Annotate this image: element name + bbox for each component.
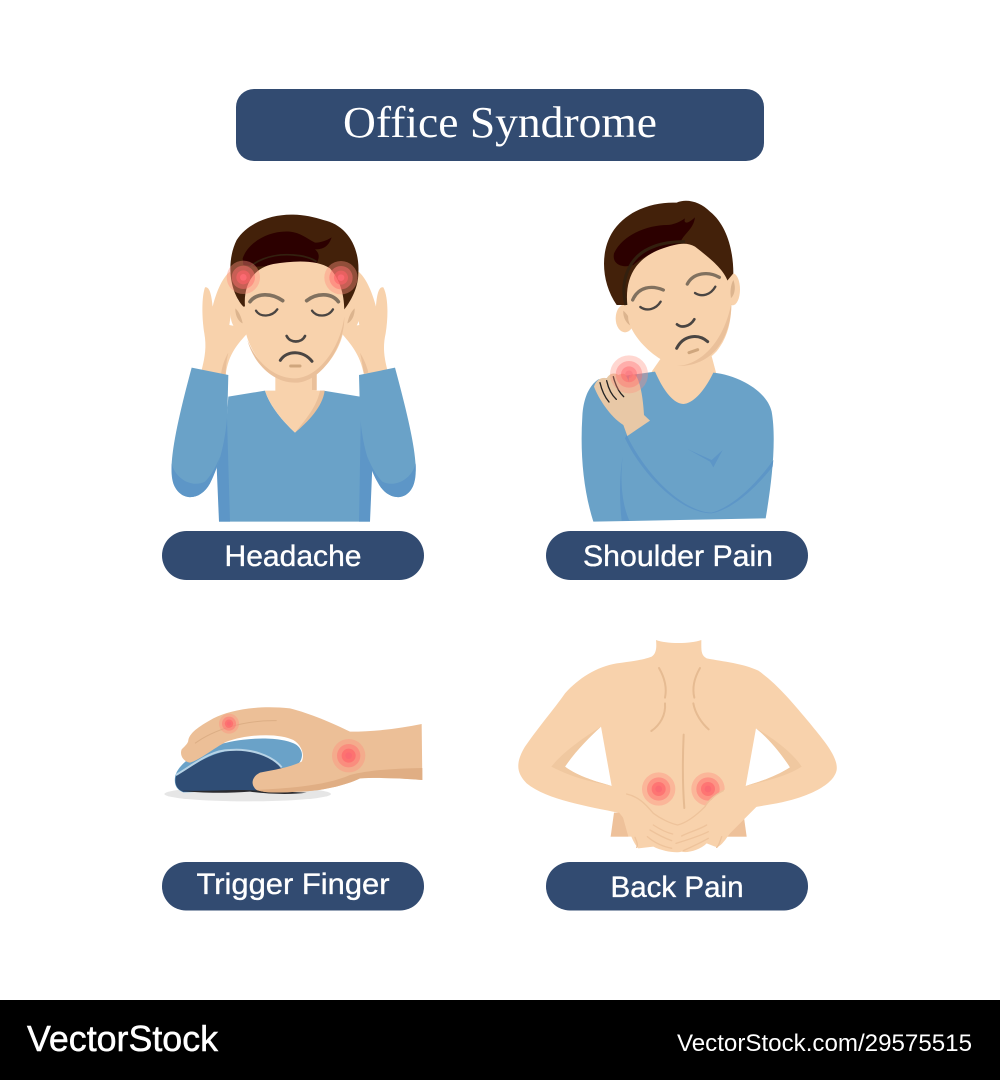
label: trigger finger: Trigger Finger	[196, 868, 390, 901]
nose	[677, 319, 694, 326]
ears	[231, 300, 248, 330]
label: shoulder pain: Shoulder Pain	[583, 540, 773, 573]
pain mark	[610, 355, 648, 393]
gaps between hands and head	[229, 312, 235, 326]
neck	[652, 350, 717, 412]
eyebrows	[633, 287, 663, 300]
pain marks	[642, 772, 675, 806]
hand	[594, 374, 650, 436]
figure: trigger finger	[164, 707, 422, 801]
ears	[616, 304, 634, 332]
hands and forearms	[202, 272, 387, 375]
face	[245, 261, 345, 382]
footer bar: VectorStock	[27, 1018, 219, 1059]
torso	[582, 372, 774, 522]
label: shoulder pain	[546, 531, 808, 580]
hand	[181, 707, 422, 792]
figure: headache	[171, 215, 416, 522]
label: headache: Headache	[224, 540, 362, 573]
eyes	[256, 309, 277, 316]
hair	[604, 201, 733, 305]
face	[627, 244, 731, 366]
mouth	[280, 353, 312, 361]
nose	[287, 336, 305, 341]
finger lines	[600, 377, 624, 402]
figure: back pain	[518, 640, 837, 852]
shadow	[164, 787, 331, 801]
arm shading	[551, 727, 612, 786]
hands	[618, 789, 757, 852]
label: headache	[162, 531, 424, 580]
pain marks	[227, 261, 260, 294]
title	[236, 89, 764, 161]
torso	[219, 391, 370, 522]
footer bar	[0, 1000, 1000, 1080]
figure: shoulder pain	[582, 201, 774, 522]
hair back	[230, 215, 358, 309]
eyebrows	[250, 295, 283, 302]
white arm gaps	[565, 727, 612, 786]
label: back pain	[546, 862, 808, 910]
label: back pain: Back Pain	[610, 871, 744, 904]
label: trigger finger	[162, 862, 424, 910]
mouse	[175, 739, 302, 792]
hair highlight	[614, 217, 695, 266]
eyes	[640, 302, 661, 309]
back body	[518, 640, 837, 837]
hair highlight	[243, 232, 332, 267]
mouth	[677, 337, 708, 348]
sleeves	[171, 368, 228, 497]
pain marks	[219, 714, 239, 734]
footer bar: VectorStock.com/29575515	[677, 1030, 972, 1057]
spine and shoulder blades	[651, 668, 709, 808]
neck	[275, 367, 317, 393]
title: Office Syndrome	[343, 98, 657, 147]
